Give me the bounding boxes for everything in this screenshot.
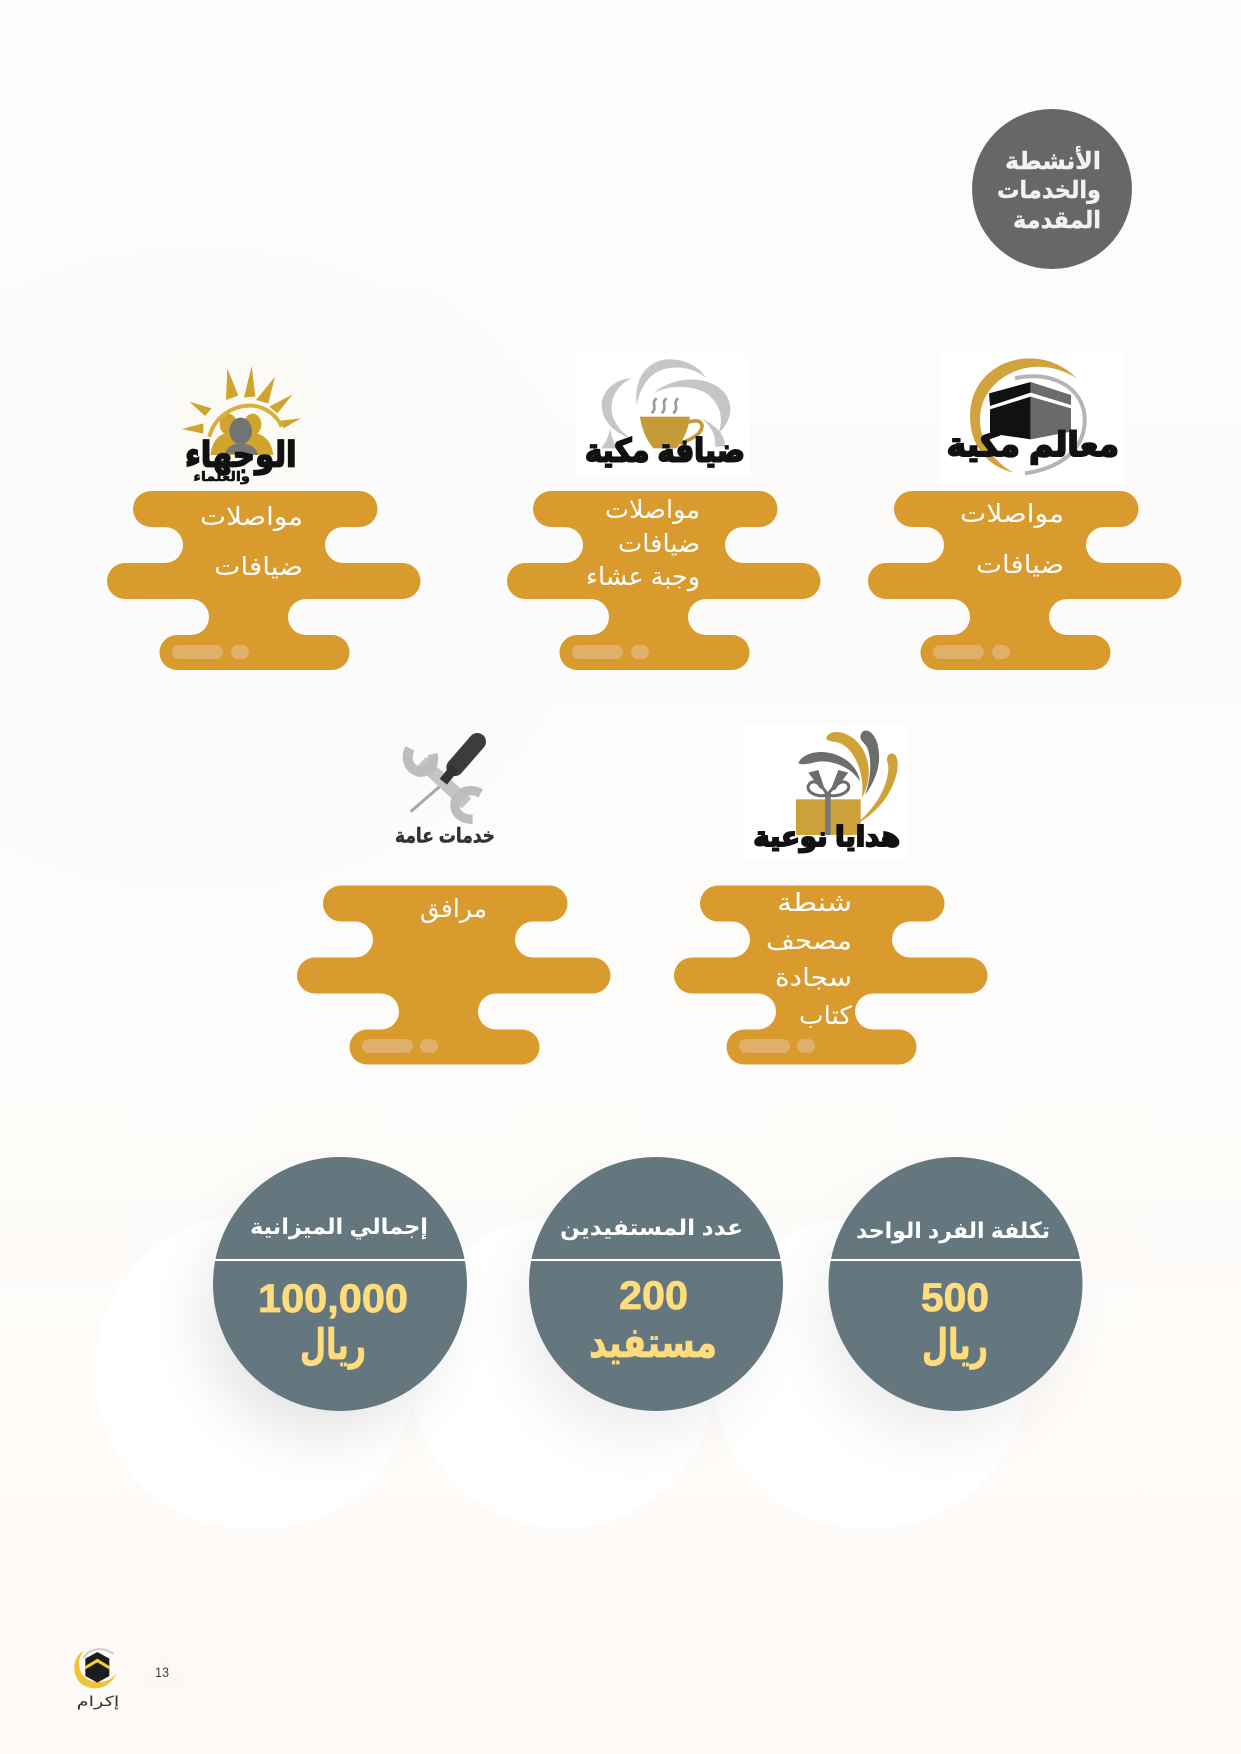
logo: ضيافة مكية (577, 353, 750, 477)
stat: beneficiaries (520, 1157, 783, 1436)
panel: blob 1 الوجهاء (107, 491, 420, 670)
logo: خدمات عامة (395, 742, 495, 848)
stat: cost per person (819, 1157, 1083, 1436)
logo: هدايا نوعية (743, 723, 909, 859)
panel: blob 5 هدايا: مصحف (766, 927, 852, 955)
logo: الوجهاء والعلماء (170, 360, 310, 486)
panel: blob 2 ضيافة (507, 491, 820, 670)
logo: الوجهاء والعلماء: والعلماء (193, 469, 250, 484)
logo: ضيافة مكية: ضيافة مكية (585, 433, 745, 469)
logo: خدمات عامة: خدمات عامة (395, 825, 495, 848)
stat: total budget: ريال (300, 1321, 366, 1369)
header badge: والخدمات (997, 177, 1101, 204)
stat: cost per person: تكلفة الفرد الواحد (856, 1218, 1050, 1244)
panel: blob 3 معالم (868, 491, 1182, 670)
panel: blob 2 ضيافة: مواصلات (605, 496, 700, 524)
stat: beneficiaries: عدد المستفيدين (560, 1215, 743, 1241)
footer logo: إكرام (77, 1695, 119, 1710)
panel: blob 3 معالم: ضيافات (976, 551, 1064, 579)
stat: total budget: 100,000 (258, 1277, 408, 1321)
stat: total budget: إجمالي الميزانية (250, 1214, 428, 1240)
header badge: المقدمة (1013, 207, 1101, 234)
footer logo (74, 1649, 119, 1710)
panel: blob 2 ضيافة: ضيافات (618, 530, 700, 558)
panel: blob 1 الوجهاء: ضيافات (214, 553, 303, 581)
page number (142, 1654, 186, 1689)
header badge (972, 109, 1132, 269)
panel: blob 4 خدمات عامة: مرافق (420, 895, 487, 923)
panel: blob 5 هدايا: كتاب (799, 1002, 852, 1030)
panel: blob 3 معالم: مواصلات (960, 500, 1064, 528)
panel: blob 5 هدايا: شنطة (777, 889, 852, 917)
page number: 13 (155, 1664, 169, 1680)
logo: معالم مكية: معالم مكية (947, 427, 1119, 464)
stat: beneficiaries: 200 (619, 1274, 688, 1318)
stat: total budget (204, 1157, 467, 1436)
panel: blob 4 خدمات عامة (297, 886, 610, 1064)
panel: blob 2 ضيافة: وجبة عشاء (586, 563, 700, 592)
header badge: الأنشطة (1005, 146, 1101, 175)
panel: blob 5 هدايا: سجادة (775, 964, 852, 992)
panel: blob 1 الوجهاء: مواصلات (200, 503, 303, 531)
stat: cost per person: 500 (921, 1276, 989, 1320)
logo: معالم مكية (939, 353, 1125, 485)
logo: الوجهاء والعلماء: الوجهاء (185, 436, 297, 476)
logo: هدايا نوعية: هدايا نوعية (753, 821, 900, 853)
panel: blob 5 هدايا (674, 886, 988, 1064)
background white shapes (95, 1216, 1027, 1528)
stat: cost per person: ريال (922, 1321, 988, 1369)
stat: beneficiaries: مستفيد (589, 1319, 717, 1366)
